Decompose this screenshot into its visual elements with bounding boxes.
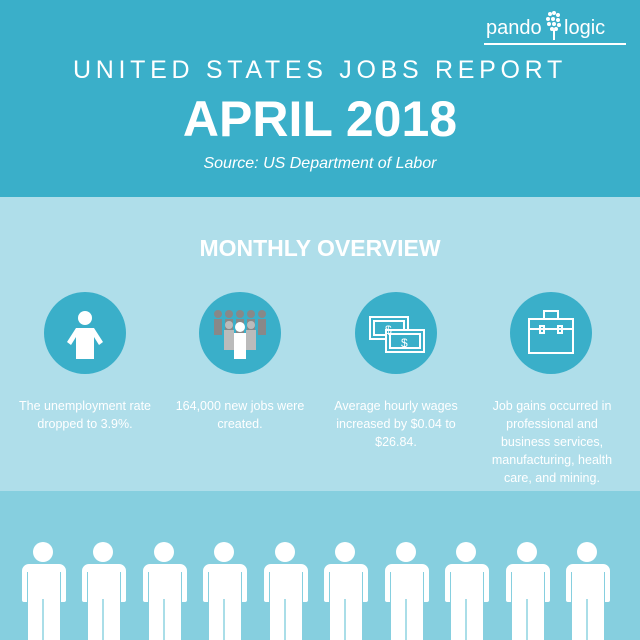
icon: briefcase [510, 292, 592, 374]
caption 3: Average hourly wages increased by $0.04 to $26.84. [334, 399, 458, 449]
logo [484, 11, 626, 45]
logo: logic [564, 17, 605, 39]
section heading: MONTHLY OVERVIEW [199, 235, 441, 261]
heading: date: APRIL 2018 [183, 91, 457, 147]
source: Source: US Department of Labor [203, 155, 436, 172]
caption 1: The unemployment rate dropped to 3.9%. [19, 399, 151, 431]
icon: money: $ [385, 323, 392, 337]
caption 4: Job gains occurred in professional and business services, manufacturing, health care, and mining. [492, 399, 612, 485]
title: UNITED STATES JOBS REPORT [73, 56, 567, 84]
people row [22, 542, 610, 640]
icon: person [44, 292, 126, 374]
caption 2: 164,000 new jobs were created. [176, 399, 304, 431]
icon: money [355, 292, 437, 374]
icon: money: $ [401, 336, 408, 350]
icon: crowd [199, 292, 281, 374]
logo: pando [486, 17, 542, 39]
